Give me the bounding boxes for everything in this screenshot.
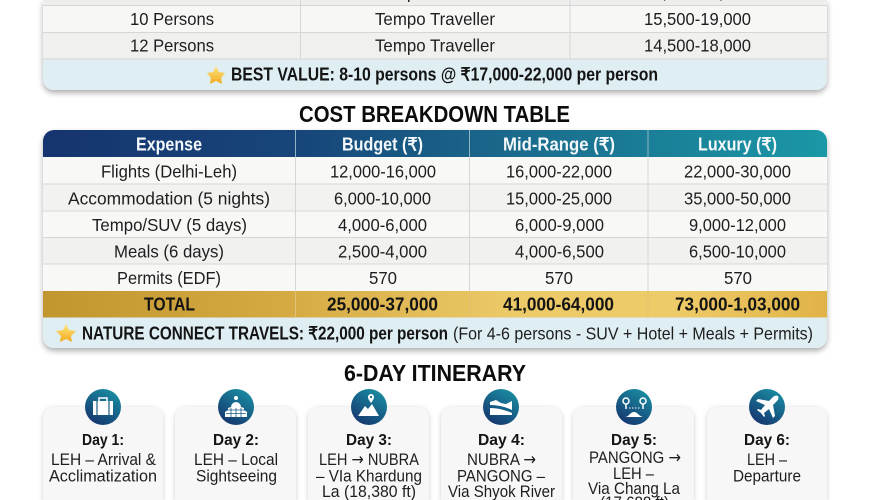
table row: tempo or SUV: 9,000-12,000 [689, 215, 786, 235]
icon: route between two pins [616, 389, 652, 425]
card: day 3 [308, 389, 429, 500]
table row: tempo or SUV: 6,000-9,000 [515, 215, 604, 235]
table row: flights: 16,000-22,000 [506, 162, 612, 182]
table row: 12 persons [130, 36, 751, 56]
table row: 10 persons: 10 Persons [130, 9, 214, 29]
icon: mountain with pin [351, 389, 387, 425]
table row: meals [114, 242, 786, 262]
table header row [136, 134, 777, 154]
icon: best value star [207, 66, 225, 84]
card: day 4 [441, 389, 562, 500]
heading: 6-day itinerary: 6-DAY ITINERARY [344, 360, 526, 386]
day 4 text: Day 4: [478, 432, 525, 449]
table header row: Mid-Range (₹) [503, 134, 615, 154]
table header row: Budget (₹) [342, 134, 423, 154]
table row: flights: Flights (Delhi-Leh) [101, 162, 237, 182]
table row: 12 persons: Tempo Traveller [375, 36, 495, 56]
table row: accommodation: Accommodation (5 nights) [68, 188, 270, 208]
icon: offer star [56, 324, 76, 342]
table row: flights: 12,000-16,000 [330, 162, 436, 182]
day 4 text: PANGONG – [457, 466, 545, 486]
day 1 text: LEH – Arrival & [51, 450, 157, 469]
card: day 5 [573, 389, 694, 500]
card: day 6 [707, 389, 827, 500]
table row: total: 25,000-37,000 [327, 294, 438, 314]
table row: accommodation: 6,000-10,000 [334, 188, 431, 208]
table row: 12 persons: 12 Persons [130, 36, 214, 56]
table row: permits: Permits (EDF) [117, 268, 221, 288]
day 1 text: Day 1: [82, 432, 124, 449]
table row: flights [101, 162, 791, 182]
table row: accommodation: 35,000-50,000 [684, 188, 791, 208]
panel: cost breakdown table [43, 130, 827, 348]
day 2 text: LEH – Local [194, 450, 278, 469]
day 5 text: Via Chang La [588, 479, 680, 498]
heading: cost breakdown table: COST BREAKDOWN TABLE [299, 101, 570, 127]
table row: 10 persons: Tempo Traveller [375, 9, 495, 29]
table header row: Expense [136, 134, 202, 154]
day 1 text [49, 432, 157, 486]
day 2 text: Sightseeing [196, 466, 277, 486]
table row: meals: 6,500-10,000 [689, 242, 786, 262]
day 6 text [733, 432, 801, 486]
day 3 text: – VIa Khardung [316, 466, 422, 486]
table row: 10 persons: 15,500-19,000 [644, 9, 751, 29]
table row: total: 73,000-1,03,000 [675, 294, 800, 314]
table row: 8 persons [408, 0, 722, 2]
day 6 text: Departure [733, 466, 801, 486]
callout: Nature Connect Travels price: NATURE CONNECT TRAVELS: ₹22,000 per person [82, 324, 448, 344]
day 4 text [448, 432, 555, 500]
day 1 text: Acclimatization [49, 466, 157, 486]
callout: best value: BEST VALUE: 8-10 persons @ ₹17,000-22,000 per person [231, 64, 658, 84]
table row: meals: 2,500-4,000 [338, 242, 427, 262]
day 3 text: Day 3: [346, 432, 392, 449]
table row: total: TOTAL [144, 294, 195, 314]
table row: tempo or SUV [92, 215, 786, 235]
panel: vehicle price per person table [43, 0, 827, 90]
table row: flights: 22,000-30,000 [684, 162, 791, 182]
day 5 text: LEH – [613, 464, 654, 483]
table row: total: 41,000-64,000 [503, 294, 614, 314]
day 5 text: PANGONG → [589, 448, 681, 468]
table row: 10 persons [130, 9, 751, 29]
table row: permits: 570 [369, 268, 397, 288]
card: day 1 [43, 389, 163, 500]
day 5 text: Day 5: [611, 432, 657, 449]
table row: permits [117, 268, 752, 288]
table header row: Luxury (₹) [698, 134, 777, 154]
card: day 2 [175, 389, 296, 500]
day 6 text: LEH – [747, 450, 787, 469]
day 5 text [588, 432, 681, 500]
icon: monastery [218, 389, 254, 425]
day 4 text: NUBRA → [467, 450, 536, 470]
icon: valley and river [483, 389, 519, 425]
icon: suitcase [85, 389, 121, 425]
day 3 text [316, 432, 422, 500]
day 6 text: Day 6: [744, 432, 790, 449]
callout: Nature Connect Travels price: (For 4-6 persons - SUV + Hotel + Meals + Permits) [453, 324, 813, 344]
table row: total [144, 294, 800, 314]
table row: meals: 4,000-6,500 [515, 242, 604, 262]
table row: 12 persons: 14,500-18,000 [644, 36, 751, 56]
day 3 text: LEH → NUBRA [319, 450, 420, 470]
table row: meals: Meals (6 days) [114, 242, 224, 262]
table row: tempo or SUV: Tempo/SUV (5 days) [92, 215, 247, 235]
day 2 text: Day 2: [213, 432, 259, 449]
table row: permits: 570 [545, 268, 573, 288]
table row: accommodation: 15,000-25,000 [506, 188, 612, 208]
table row: tempo or SUV: 4,000-6,000 [338, 215, 427, 235]
table row: accommodation [68, 188, 791, 208]
day 2 text [194, 432, 278, 486]
callout: Nature Connect Travels price [82, 324, 813, 344]
icon: airplane [749, 389, 785, 425]
table row: permits: 570 [724, 268, 752, 288]
